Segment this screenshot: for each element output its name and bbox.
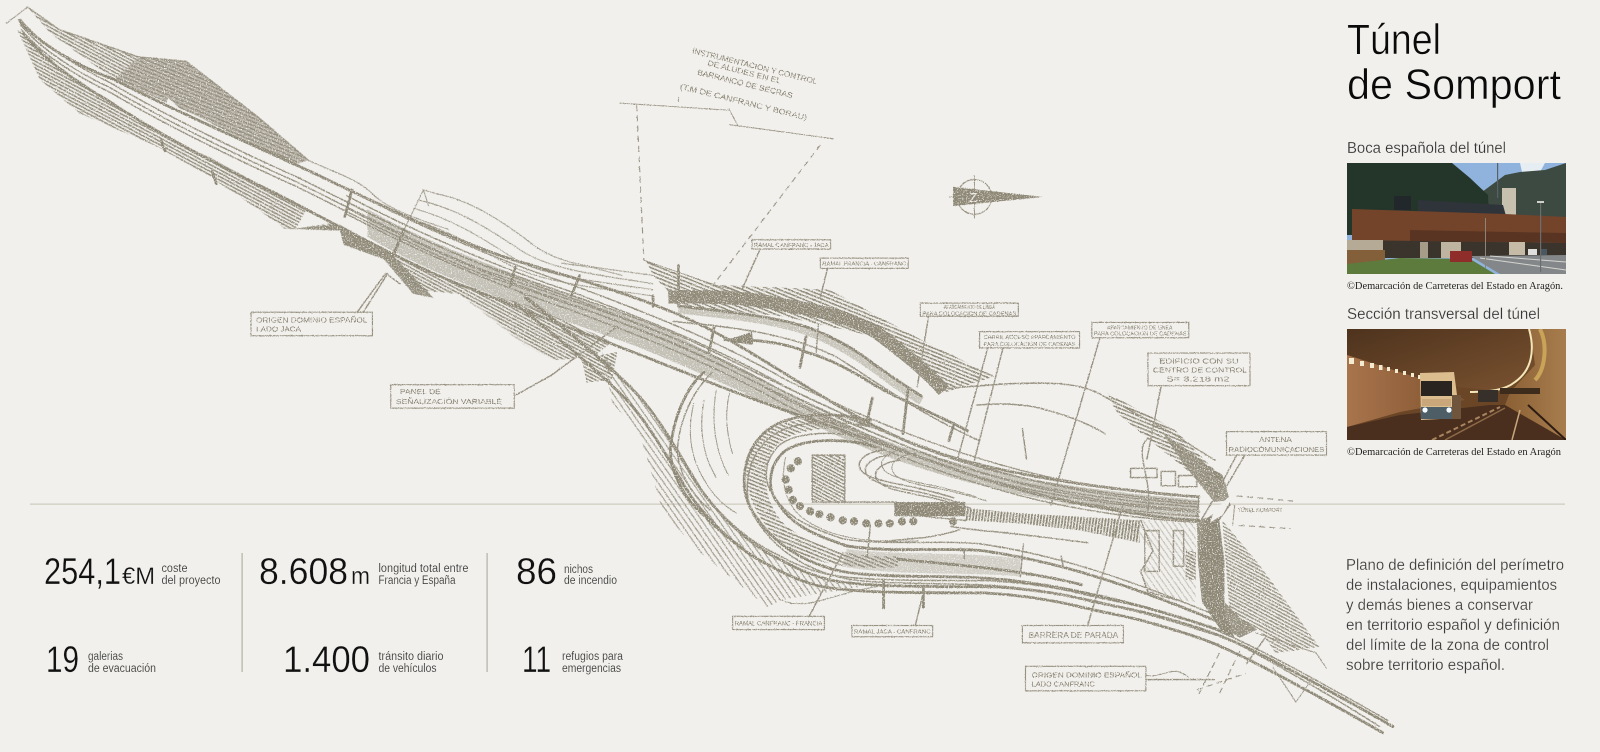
stat: tunnel length: longitud total entre [378,563,468,575]
label: antena radiocomunicaciones: ANTENA [1259,436,1292,444]
stat: daily traffic: de vehículos [378,663,437,675]
avalanche control label: BARRANCO DE SECRAS [696,68,794,100]
label: ramal Francia Canfranc [820,258,908,297]
label: ramal Canfranc Jaca: RAMAL CANFRANC - JACA [754,243,829,249]
title: Túnel [1347,16,1441,64]
stat: fire niches: nichos [564,564,593,576]
label: ramal Jaca Canfranc: RAMAL JACA - CANFRANC [854,630,931,636]
label: antena radiocomunicaciones [1219,432,1327,490]
label: aparcamiento de línea 1 [917,303,1018,387]
label: aparcamiento de línea 1: APARCAMIENTO DE LINEA [944,305,995,311]
label: ramal Canfranc Francia: RAMAL CANFRANC - FRANCIA [735,621,823,628]
description paragraph: de instalaciones, equipamientos [1346,577,1557,594]
label: ramal Canfranc Jaca [742,240,831,290]
photo: tunnel mouth [1347,163,1566,274]
avalanche control label [679,46,819,122]
icon: north arrow [949,176,1043,218]
rest area dots [782,457,957,528]
label: aparcamiento de línea 2: PARA COLOCACION DE CADENAS [1094,332,1187,338]
tick marks across roads [161,141,1063,608]
hairpin loop [744,415,1233,641]
stat: project cost: €M [122,563,155,590]
label: ramal Canfranc Francia [733,553,843,630]
label: origen dominio lado Jaca [251,273,400,336]
label: ramal Jaca Canfranc [852,588,933,637]
stat: project cost [44,551,220,592]
photo heading: boca española: Boca española del túnel [1347,140,1506,157]
label: aparcamiento de línea 1: PARA COLOCACION DE CADENAS [922,311,1017,317]
avalanche control label: INSTRUMENTACION Y CONTROL [691,46,819,86]
photo caption 2: ©Demarcación de Carreteras del Estado en Aragón [1347,447,1562,458]
upper mountain hatching [6,7,308,165]
tail road features [1146,633,1327,702]
avalanche control dashed area [619,97,834,291]
avalanche control label: DE ALUDES EN EL [707,59,783,86]
stat: emergency refuges: refugios para [562,651,624,663]
stat: emergency refuges [522,639,624,680]
description paragraph: en territorio español y definición [1346,617,1560,634]
label: edificio centro de control: EDIFICIO CON SU [1159,357,1239,365]
title [1347,16,1561,109]
label: edificio centro de control: CENTRO DE CONTROL [1153,366,1247,374]
label: origen dominio lado Jaca: LADO JACA [256,326,301,334]
stat: emergency refuges: emergencias [562,663,621,675]
west slope contours [582,352,878,607]
photo: tunnel interior [1347,329,1566,440]
north ramps with dark hatching [646,260,1230,502]
stat: daily traffic: tránsito diario [378,651,444,663]
ring road and inner contours [670,372,740,546]
title: de Somport [1347,61,1561,109]
stat: fire niches [516,551,617,592]
description paragraph: del límite de la zona de control [1346,637,1549,654]
description paragraph: Plano de definición del perímetro [1346,557,1564,574]
icon: north arrow: Z [969,190,977,205]
avalanche control label: (T.M DE CANFRANC Y BORAU) [679,82,808,122]
label: antena radiocomunicaciones: RADIOCOMUNICACIONES [1229,446,1325,454]
stat: daily traffic [283,639,444,680]
stat: project cost: coste [162,563,188,575]
label: origen dominio lado Jaca: ORIGEN DOMINIO ESPAÑOL [256,315,367,324]
stat: fire niches: de incendio [564,575,617,587]
label: aparcamiento de línea 2 [1051,322,1189,505]
control building area [1122,439,1219,602]
label: barrera de parada: BARRERA DE PARADA [1029,631,1119,640]
north contour lines [308,160,653,296]
stat: fire niches: 86 [516,551,557,592]
west sweeping road [515,292,1393,733]
column divider [242,553,243,672]
parking and hatched platforms [812,455,1140,543]
stat: tunnel length [259,551,468,592]
horizontal divider [30,504,1565,505]
column divider [486,553,488,672]
label: carril acceso aparcamiento [958,332,1080,460]
stat: tunnel length: 8.608 [259,551,348,592]
stat: evacuation galleries: 19 [46,639,79,680]
dense slope by tunnel mouth [1197,465,1319,653]
stat: evacuation galleries [46,639,156,680]
description paragraph: sobre territorio español. [1346,657,1505,674]
label: ramal Francia Canfranc: RAMAL FRANCIA - CANFRANC [822,261,906,267]
label: origen dominio lado Canfranc [1026,666,1214,691]
label: panel de señalización: PANEL DE [400,388,441,396]
label: origen dominio lado Canfranc: LADO CANFRANC [1032,681,1095,689]
description paragraph [1346,557,1564,674]
stat: evacuation galleries: galerias [88,651,123,663]
label: barrera de parada [1022,503,1123,643]
motorway lines [19,19,1200,522]
label: carril acceso aparcamiento: PARA COLOCACION DE CADENAS [984,342,1076,348]
stat: project cost: del proyecto [162,575,220,587]
stat: evacuation galleries: de evacuación [88,663,156,675]
label: edificio centro de control [1147,353,1250,459]
label: panel de señalización: SEÑALIZACIÓN VARIABLE [396,397,502,406]
lower slope contour band [17,30,612,360]
label: edificio centro de control: S= 3.218 m2 [1166,376,1230,384]
stat: emergency refuges: 11 [522,639,551,680]
description paragraph: y demás bienes a conservar [1346,597,1533,614]
label: panel de señalización [391,327,617,408]
label: carril acceso aparcamiento: CARRIL ACCESO APARCAMIENTO [984,335,1076,341]
label: túnel Somport: TÚNEL SOMPORT [1238,507,1283,514]
stat: tunnel length: Francia y España [378,575,456,587]
stat: project cost: 254,1 [44,551,121,592]
label: aparcamiento de línea 2: APARCAMIENTO DE LINEA [1107,326,1173,332]
label: origen dominio lado Canfranc: ORIGEN DOMINIO ESPAÑOL [1032,671,1142,680]
stat: daily traffic: 1.400 [283,639,370,680]
stat: tunnel length: m [351,563,370,590]
photo caption 1: ©Demarcación de Carreteras del Estado en Aragón. [1347,281,1563,292]
photo heading: sección transversal: Sección transversal del túnel [1347,306,1540,323]
